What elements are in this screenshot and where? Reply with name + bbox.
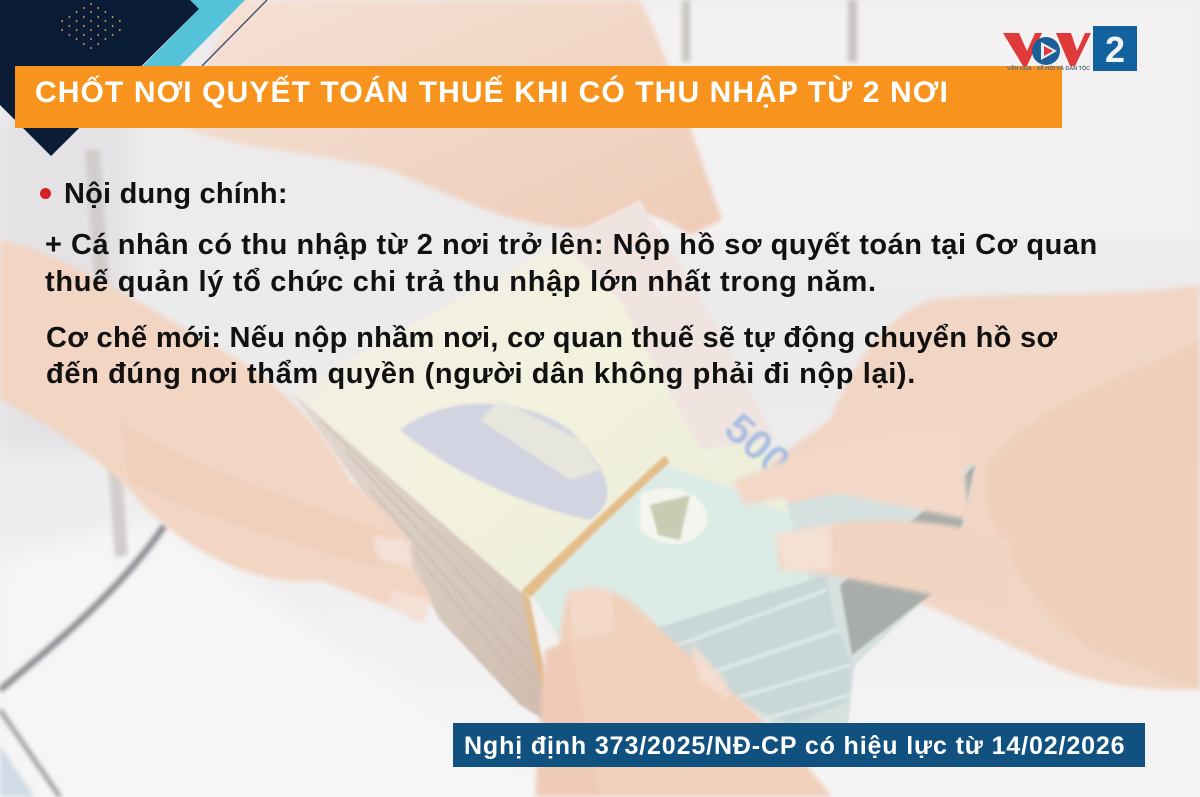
title banner bbox=[15, 66, 1062, 128]
paragraph: two or more income sources bbox=[45, 229, 1098, 298]
banknote stack, front edge bbox=[292, 392, 548, 722]
printed 500 numerals: 500 bbox=[716, 404, 800, 486]
banknote top face bbox=[292, 200, 790, 600]
counter details bbox=[85, 150, 128, 558]
bottom hand bbox=[548, 588, 832, 797]
light blue band bbox=[143, 0, 245, 66]
engraved house and trees bbox=[400, 404, 607, 520]
banknote stack, right side layers bbox=[640, 465, 975, 730]
section heading: Nội dung chính: bbox=[64, 178, 288, 210]
paragraph: two or more income sources: thuế quản lý tổ chức chi trả thu nhập lớn nhất trong năm. bbox=[45, 266, 877, 298]
title text: CHỐT NƠI QUYẾT TOÁN THUẾ KHI CÓ THU NHẬP TỪ 2 NƠI bbox=[35, 76, 949, 109]
rubber band bbox=[522, 455, 670, 598]
channel number badge bbox=[1093, 26, 1137, 71]
paragraph: new mechanism: Cơ chế mới: Nếu nộp nhầm nơi, cơ quan thuế sẽ tự động chuyển hồ sơ bbox=[46, 322, 1057, 354]
VOV wordmark bbox=[1003, 33, 1091, 66]
right arm and hand bbox=[735, 285, 1200, 690]
source banner bbox=[453, 723, 1145, 767]
green end of the top note bbox=[526, 465, 810, 640]
decree text: Nghị định 373/2025/NĐ-CP có hiệu lực từ 14/02/2026 bbox=[464, 732, 1125, 760]
right fingers bbox=[733, 430, 970, 520]
logo: VOV2 bbox=[1003, 26, 1137, 72]
top hand bbox=[180, 0, 722, 235]
paragraph: two or more income sources: + Cá nhân có thu nhập từ 2 nơi trở lên: Nộp hồ sơ quyết toán tại Cơ quan bbox=[45, 229, 1098, 261]
paragraph: new mechanism: đến đúng nơi thẩm quyền (người dân không phải đi nộp lại). bbox=[46, 358, 916, 390]
bullet dot bbox=[40, 188, 51, 199]
thin navy line bbox=[202, 0, 267, 66]
navy diamond bbox=[0, 0, 199, 156]
logo tagline: VĂN HÓA - XÃ HỘI VÀ DÂN TỘC bbox=[1007, 64, 1090, 72]
decorative corner shapes bbox=[0, 0, 268, 156]
channel number badge: 2 bbox=[1105, 29, 1125, 70]
dotted diamond pattern bbox=[61, 3, 121, 49]
left hand bbox=[0, 240, 432, 622]
paragraph: new mechanism bbox=[46, 322, 1058, 390]
